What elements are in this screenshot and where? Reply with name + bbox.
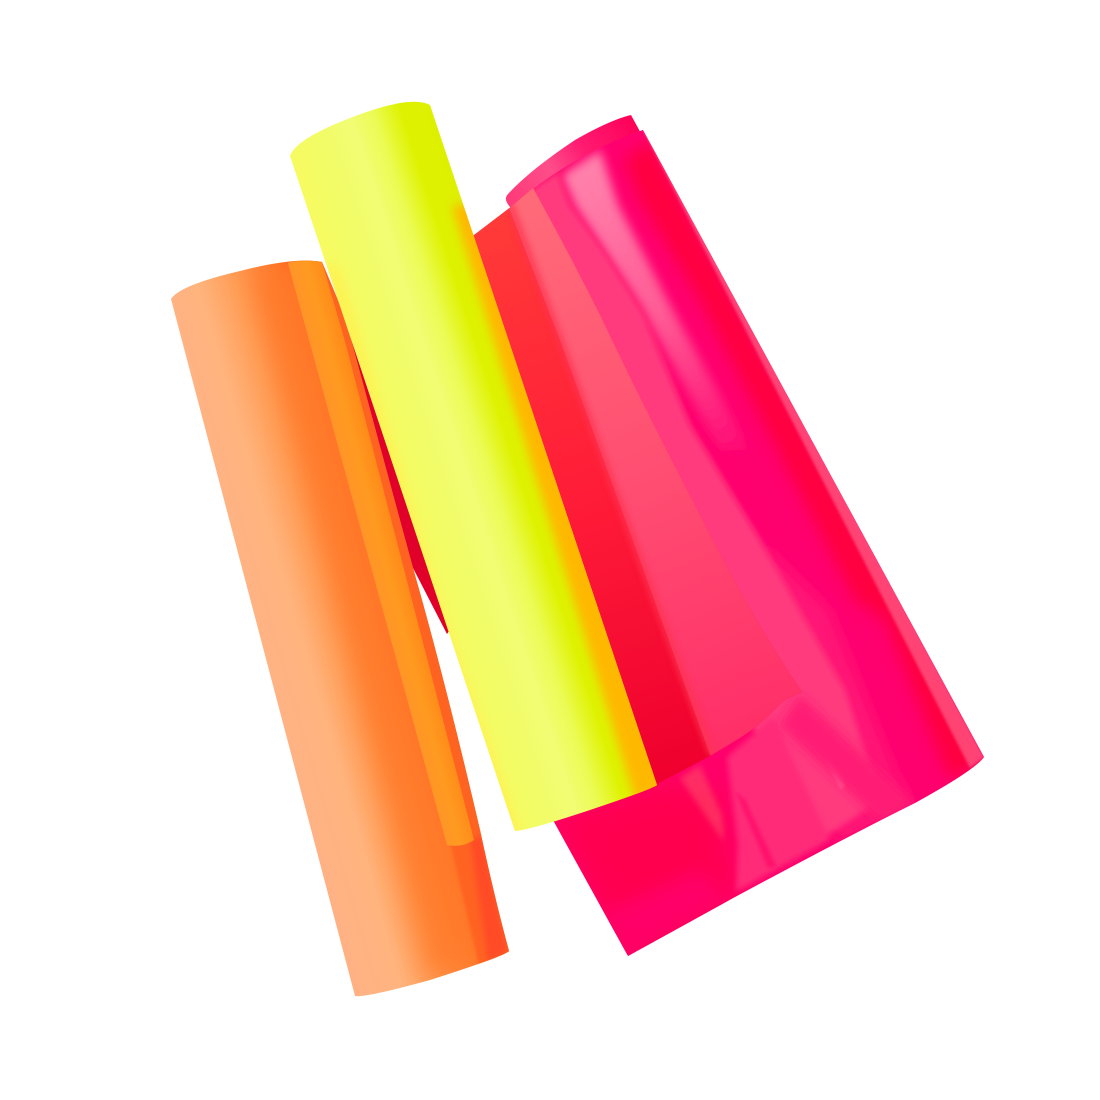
orange roll body (160, 250, 520, 1010)
orange inner strip (288, 260, 474, 846)
pink vinyl roll (506, 115, 984, 956)
red sliver between rolls (340, 290, 470, 634)
rolled top edge of pink sheet (506, 115, 650, 215)
orange vinyl roll (160, 250, 520, 1010)
orange reflection along right edge (452, 205, 670, 802)
glossy wrinkles (680, 695, 915, 892)
yellow vinyl roll (290, 102, 657, 831)
yellow roll body (290, 102, 657, 831)
red inner sheet (460, 180, 810, 800)
pink sheet body (534, 130, 984, 956)
salmon lit band (508, 180, 810, 760)
